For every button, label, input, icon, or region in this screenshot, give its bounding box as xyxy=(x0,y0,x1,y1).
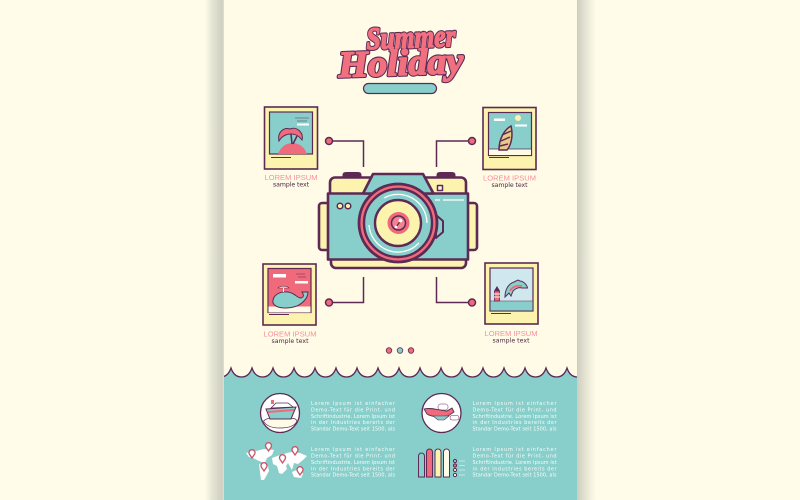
camera top buttons xyxy=(343,172,455,179)
text block: ship: in der Industries bereits der xyxy=(311,420,396,426)
right page shadow xyxy=(577,0,596,500)
camera xyxy=(319,172,477,268)
text block: plane: Standar Demo-Text seit 1500, als xyxy=(472,427,557,433)
camera right grip xyxy=(466,203,477,250)
text block: map: in der Industries bereits der xyxy=(311,466,396,472)
camera highlight xyxy=(435,199,464,201)
caption: top right: sample text xyxy=(492,182,528,189)
camera top plate xyxy=(330,178,466,200)
caption: bottom right xyxy=(484,329,538,344)
caption: top left xyxy=(264,173,318,188)
poster sheet xyxy=(224,0,577,500)
camera shutter bump xyxy=(436,215,443,238)
caption: bottom right: sample text xyxy=(492,338,530,344)
connector: top right xyxy=(436,138,476,167)
photo: bottom right dolphin xyxy=(485,263,538,324)
camera bottom plate xyxy=(331,248,466,268)
caption: top left: LOREM IPSUM xyxy=(264,173,318,182)
caption: bottom right: LOREM IPSUM xyxy=(484,329,538,338)
icon: ship xyxy=(260,394,300,432)
connector: bottom left xyxy=(326,277,364,306)
text block: map: Standar Demo-Text seit 1500, als xyxy=(311,473,395,479)
text block: map: Demo-Text für die Print- und xyxy=(311,453,395,459)
pagination dots xyxy=(386,348,414,353)
text block: chart: Standar Demo-Text seit 1500, als xyxy=(472,473,557,479)
text block: plane: Demo-Text für die Print- und xyxy=(472,407,556,413)
title: Holiday xyxy=(337,41,465,86)
caption: top right xyxy=(483,174,536,189)
camera left grip xyxy=(319,203,330,250)
icon: plane xyxy=(422,394,461,432)
title: Holiday xyxy=(337,41,465,86)
lens highlights xyxy=(369,194,427,252)
text block: chart: Schriftindustrie. Lorem Ipsum ist xyxy=(472,460,557,466)
wave line xyxy=(210,368,588,377)
text block: ship: Demo-Text für die Print- und xyxy=(311,407,395,413)
caption: bottom left: sample text xyxy=(272,338,309,345)
teal wave section xyxy=(210,368,588,500)
connector: top left xyxy=(326,138,364,167)
text block: ship xyxy=(311,401,396,433)
photo: bottom left whale xyxy=(263,264,316,325)
icon: world map with pins xyxy=(246,443,307,480)
title xyxy=(336,18,465,86)
caption: bottom left xyxy=(263,330,317,345)
text block: chart: in der Industries bereits der xyxy=(472,466,557,472)
title pill xyxy=(364,84,436,94)
camera lens xyxy=(359,184,437,262)
text block: plane: in der Industries bereits der xyxy=(472,420,557,426)
title: Summer xyxy=(366,18,457,56)
text block: chart xyxy=(472,447,557,479)
camera body xyxy=(328,194,468,260)
text block: chart: Lorem Ipsum ist einfacher xyxy=(472,447,557,453)
photo: top right surfboard xyxy=(483,108,536,170)
text block: plane: Schriftindustrie. Lorem Ipsum ist xyxy=(472,414,557,420)
camera viewfinder housing xyxy=(363,174,434,194)
caption: top left: sample text xyxy=(273,182,310,188)
title: Summer xyxy=(366,18,457,56)
camera dots xyxy=(337,203,351,209)
text block: ship: Standar Demo-Text seit 1500, als xyxy=(311,427,395,433)
connector: bottom right xyxy=(436,277,476,306)
text block: chart: Demo-Text für die Print- und xyxy=(472,453,556,459)
text block: ship: Lorem Ipsum ist einfacher xyxy=(311,401,396,407)
text block: ship: Schriftindustrie. Lorem Ipsum ist xyxy=(311,414,395,420)
photo: top left island xyxy=(264,107,318,169)
caption: bottom left: LOREM IPSUM xyxy=(263,330,317,338)
bar chart xyxy=(418,449,465,477)
text block: map: Lorem Ipsum ist einfacher xyxy=(311,447,396,453)
text block: map: Schriftindustrie. Lorem Ipsum ist xyxy=(311,460,395,466)
text block: plane xyxy=(472,401,557,433)
text block: plane: Lorem Ipsum ist einfacher xyxy=(472,401,557,407)
left page shadow xyxy=(205,0,224,500)
camera small window xyxy=(438,186,442,190)
text block: map xyxy=(311,447,396,479)
caption: top right: LOREM IPSUM xyxy=(483,174,536,182)
